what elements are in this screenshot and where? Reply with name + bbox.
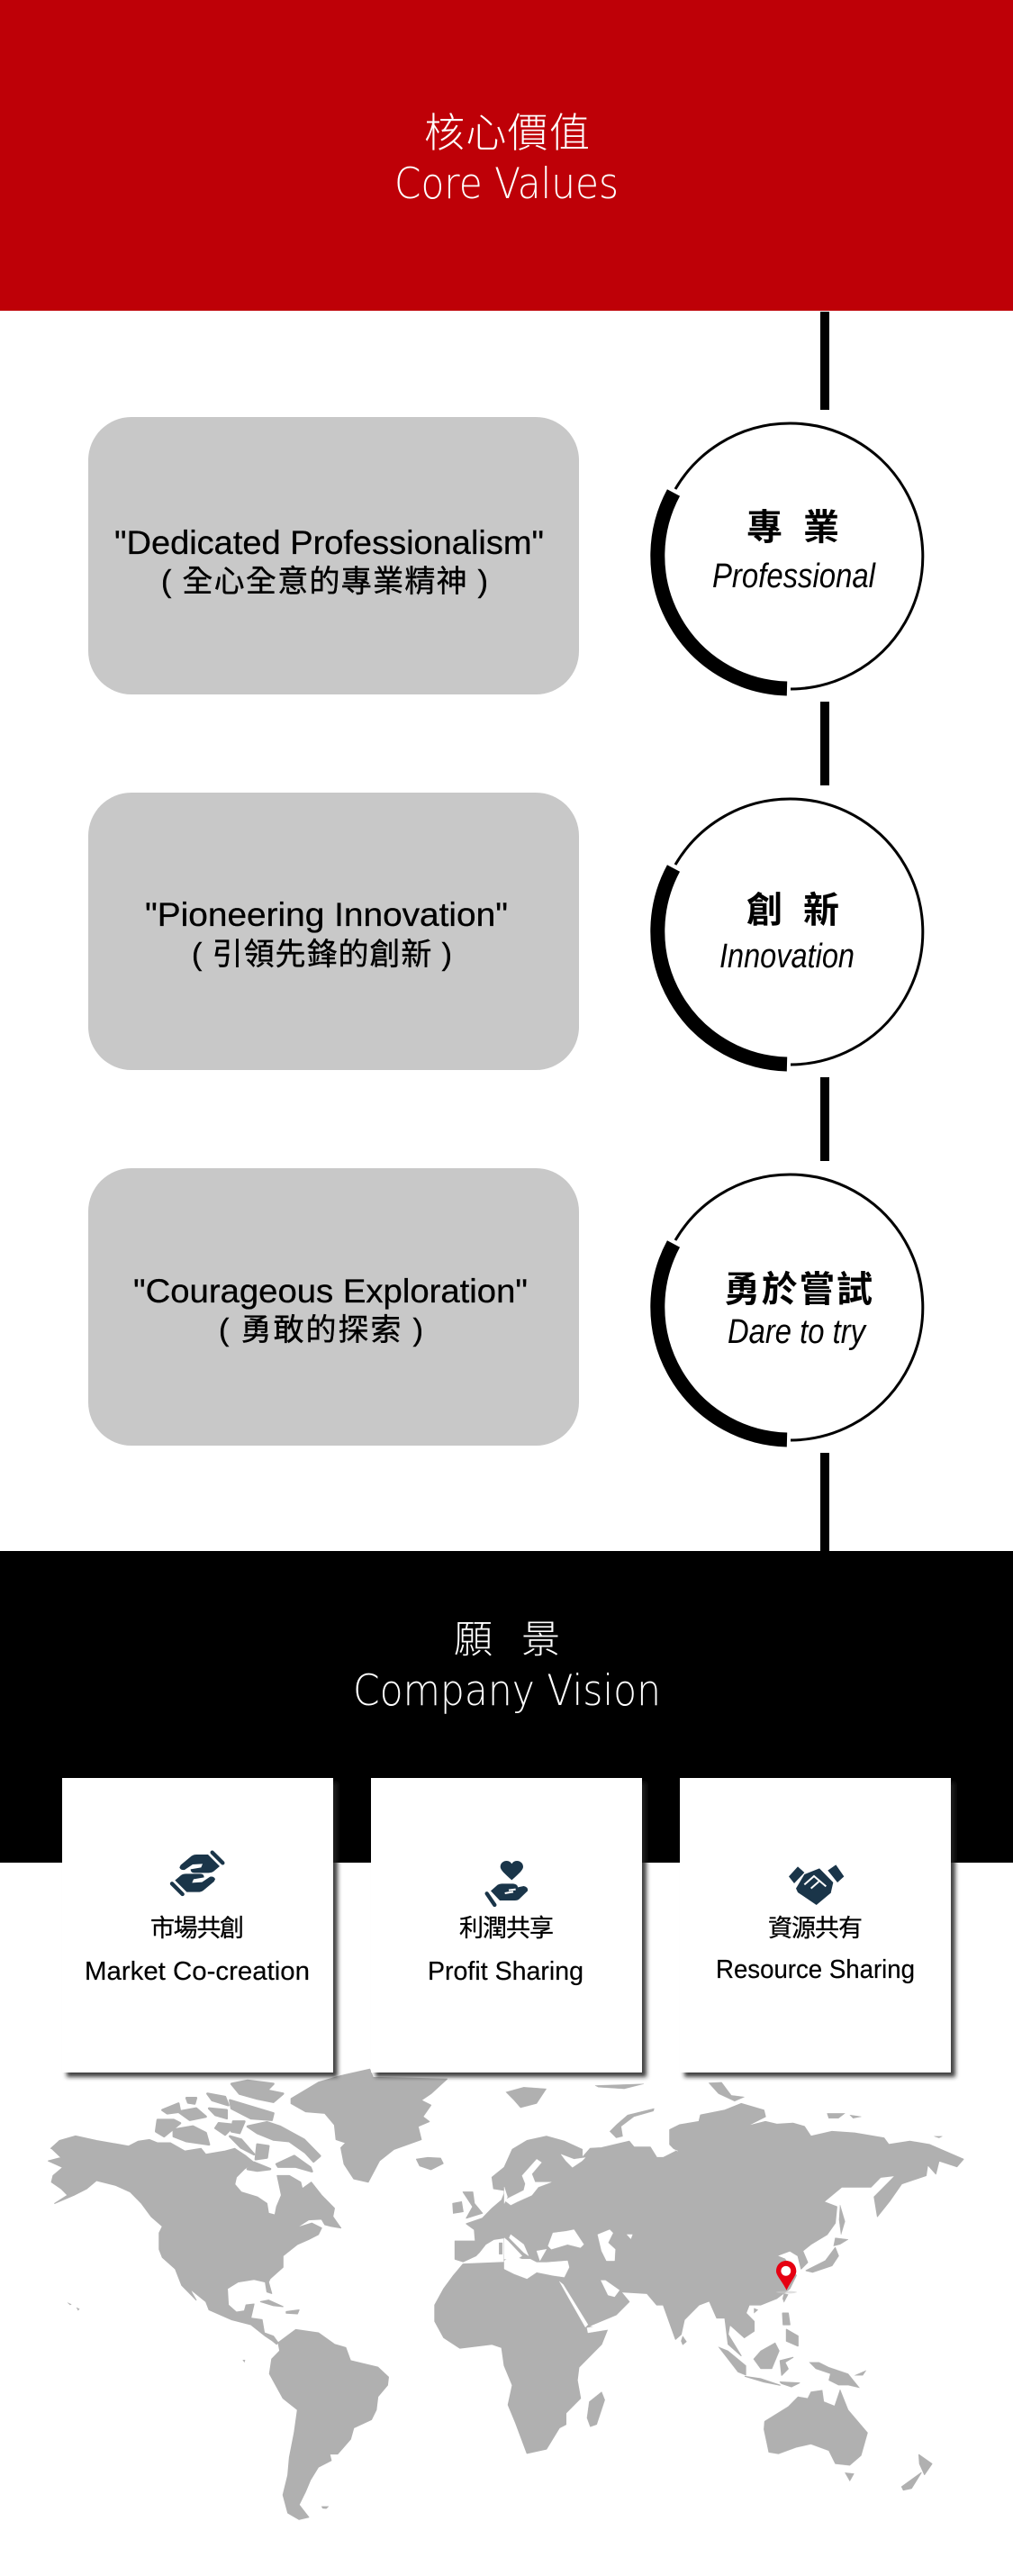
- icon: location pin: [776, 2261, 797, 2293]
- icon: hands together: [172, 1853, 222, 1894]
- card: profit sharing: [371, 1778, 642, 2073]
- text: dedicated professionalism English: "Dedicated Professionalism": [114, 524, 544, 561]
- label: professional English: Professional: [712, 558, 876, 595]
- circle: innovation: [657, 799, 923, 1065]
- connector line 3: [820, 1077, 829, 1161]
- connector line 4: [820, 1453, 829, 1552]
- text: profit sharing Chinese: 利潤共享: [459, 1915, 554, 1942]
- circle: dare to try: [657, 1175, 923, 1440]
- text: resource sharing English: Resource Sharing: [716, 1955, 915, 1984]
- card: resource sharing: [680, 1778, 951, 2073]
- connector line 1: [820, 312, 829, 410]
- panel: core values header: [0, 0, 1013, 311]
- panel: courageous exploration: [88, 1168, 579, 1446]
- panel: dedicated professionalism: [88, 417, 579, 694]
- connector line 2: [820, 702, 829, 785]
- world map: [49, 2069, 963, 2519]
- heading: vision English: Company Vision: [353, 1666, 661, 1716]
- text: profit sharing English: Profit Sharing: [428, 1957, 583, 1986]
- heading: core values English: Core Values: [394, 159, 619, 209]
- heading: vision Chinese: 願 景: [454, 1619, 560, 1662]
- heading: core values Chinese: 核心價值: [424, 110, 590, 156]
- label: innovation Chinese: 創 新: [746, 891, 839, 930]
- label: innovation English: Innovation: [719, 938, 855, 975]
- text: courageous exploration Chinese: ( 勇敢的探索 ): [219, 1313, 423, 1347]
- text: courageous exploration English: "Courageous Exploration": [133, 1273, 528, 1310]
- panel: company vision header: [0, 1551, 1013, 1863]
- text: dedicated professionalism Chinese: ( 全心全意的專業精神 ): [161, 565, 488, 599]
- label: dare to try English: Dare to try: [728, 1313, 867, 1351]
- text: market co-creation English: Market Co-creation: [85, 1957, 310, 1986]
- circle: professional: [657, 423, 923, 689]
- label: dare to try Chinese: 勇於嘗試: [724, 1270, 873, 1310]
- text: pioneering innovation English: "Pioneering Innovation": [145, 896, 508, 933]
- label: professional Chinese: 專 業: [746, 508, 839, 548]
- text: resource sharing Chinese: 資源共有: [768, 1915, 863, 1942]
- card: market co-creation: [62, 1778, 333, 2073]
- panel: pioneering innovation: [88, 793, 579, 1070]
- text: pioneering innovation Chinese: ( 引領先鋒的創新 ): [192, 938, 452, 972]
- icon: handshake: [789, 1864, 844, 1905]
- icon: hand with heart: [487, 1861, 528, 1905]
- text: market co-creation Chinese: 市場共創: [150, 1915, 244, 1942]
